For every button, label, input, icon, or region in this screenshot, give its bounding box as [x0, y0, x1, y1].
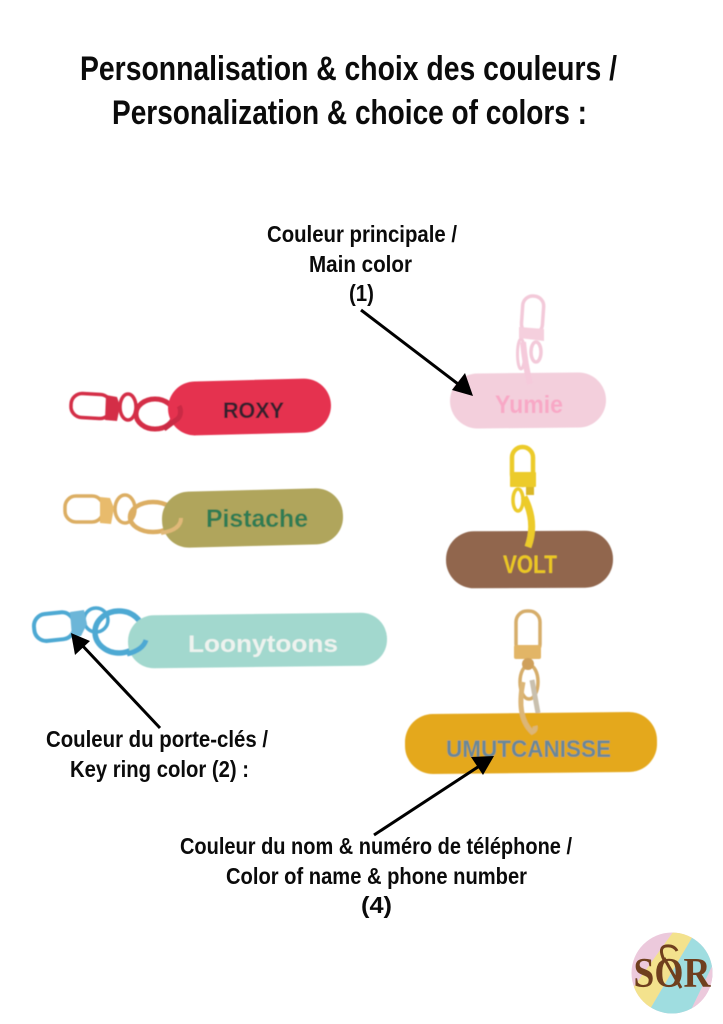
label: main color	[267, 221, 458, 306]
keychain: UMUTCANISSE mustard	[405, 611, 657, 774]
title	[80, 50, 617, 132]
label: name and phone color: (4)	[361, 892, 392, 918]
title: Personalization & choice of colors :	[112, 94, 587, 132]
logo: SOR badge	[632, 932, 712, 1014]
label: key ring color: Key ring color (2) :	[70, 756, 249, 782]
keychain: Pistache olive: Pistache	[206, 505, 308, 533]
keychain: VOLT brown	[446, 447, 613, 588]
label: key ring color: Couleur du porte-clés /	[46, 726, 269, 752]
label: main color: Main color	[309, 251, 412, 277]
keychain: Yumie pink: Yumie	[495, 391, 563, 419]
keychain: UMUTCANISSE mustard: UMUTCANISSE	[446, 736, 611, 763]
label: name and phone color: Couleur du nom & numéro de téléphone /	[180, 833, 573, 859]
logo: SOR badge: SOR	[634, 951, 711, 997]
keychain: Loonytoons mint: Loonytoons	[188, 631, 338, 658]
keychain: Loonytoons mint	[33, 608, 387, 669]
label: name and phone color: Color of name & phone number	[226, 863, 527, 889]
keychain: VOLT brown: VOLT	[503, 551, 557, 579]
label: key ring color	[46, 726, 269, 782]
keychain: ROXY red	[70, 378, 332, 436]
label: main color: Couleur principale /	[267, 221, 458, 247]
label: main color: (1)	[349, 280, 374, 306]
title: Personnalisation & choix des couleurs /	[80, 50, 617, 88]
label: name and phone color	[180, 833, 573, 918]
arrow: to name color	[374, 756, 494, 835]
arrow: to main color	[361, 310, 473, 396]
keychain: Pistache olive	[65, 488, 344, 548]
keychain: Yumie pink	[450, 295, 606, 429]
arrow: to key ring	[71, 633, 160, 728]
keychain: ROXY red: ROXY	[223, 398, 284, 423]
